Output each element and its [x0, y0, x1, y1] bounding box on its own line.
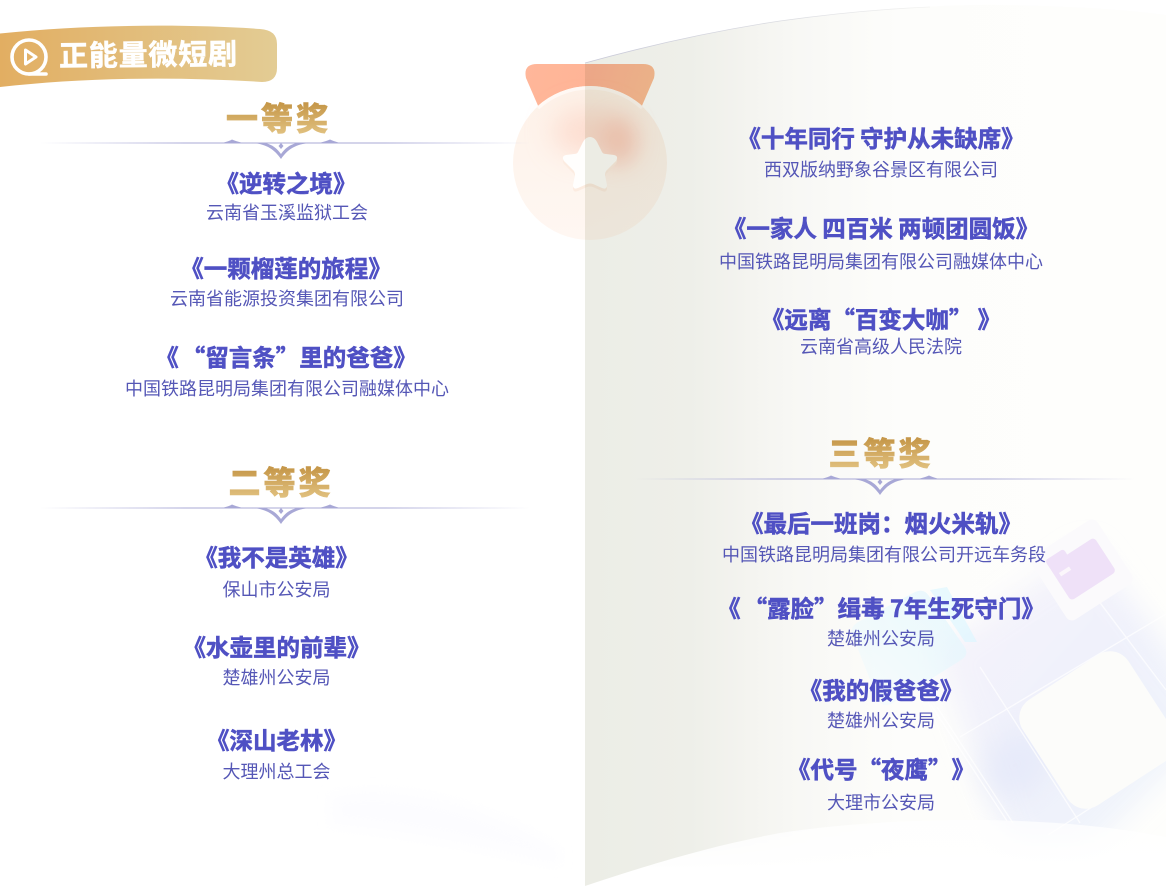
award entry: 《我的假爸爸》 — [799, 672, 963, 706]
award entry: 《十年同行 守护从未缺席》 — [737, 120, 1025, 154]
award entry: 中国铁路昆明局集团有限公司融媒体中心 — [125, 375, 449, 401]
award entry — [722, 504, 1046, 567]
award entry: 《逆转之境》 — [216, 164, 356, 198]
award entry: 楚雄州公安局 — [827, 707, 935, 733]
heading: first prize with ornament — [54, 94, 516, 159]
white rounded tile — [1011, 643, 1166, 817]
award entry — [717, 590, 1045, 651]
award entry: 《 留言条”里的爸爸》 — [155, 338, 417, 372]
award entry: 大理市公安局 — [827, 789, 935, 815]
award entry — [737, 120, 1025, 182]
banner — [0, 26, 277, 87]
award entry — [125, 338, 449, 401]
award entry: 保山市公安局 — [222, 576, 330, 602]
award entry: 《水壶里的前辈》 — [182, 628, 370, 662]
award entry: 楚雄州公安局 — [827, 625, 935, 651]
right page — [585, 5, 1166, 886]
award entry: 》 — [952, 750, 975, 784]
page bottom white curve — [585, 820, 1166, 886]
award entry: 云南省高级人民法院 — [800, 333, 962, 359]
award entry: 《最后一班岗：烟火米轨》 — [740, 504, 1022, 538]
award entry: 《远离“百变大咖” 》 — [761, 300, 1001, 334]
award entry: 云南省玉溪监狱工会 — [206, 199, 368, 225]
page top edge — [585, 7, 930, 63]
award entry — [787, 750, 975, 815]
award entry — [194, 538, 359, 602]
heading: second prize with ornament: 二等奖 — [228, 458, 334, 504]
award entry — [206, 722, 347, 784]
banner title: 正能量微短剧 — [59, 31, 238, 75]
award entry: “ — [182, 338, 205, 372]
award entry: 中国铁路昆明局集团有限公司融媒体中心 — [719, 248, 1043, 274]
award entry: 楚雄州公安局 — [222, 664, 330, 690]
panel: second prize continued — [719, 120, 1043, 359]
award entry — [182, 628, 370, 690]
award entry: 云南省能源投资集团有限公司 — [170, 285, 404, 311]
heading: third prize with ornament: 三等奖 — [828, 429, 934, 475]
award entry — [799, 672, 963, 733]
award entry — [170, 250, 404, 311]
award entry — [719, 210, 1043, 274]
award entry: 中国铁路昆明局集团有限公司开远车务段 — [722, 541, 1046, 567]
panel: third prize — [653, 429, 1120, 815]
heading: third prize with ornament — [653, 429, 1120, 495]
tech tiles decoration — [852, 517, 1166, 860]
banner shape and play icon — [0, 26, 277, 87]
lilac folder card — [1029, 517, 1135, 623]
award entry: 西双版纳野象谷景区有限公司 — [764, 156, 998, 182]
faint left bottom wash — [330, 791, 560, 866]
award entry — [761, 300, 1001, 359]
award entry: 《一颗榴莲的旅程》 — [180, 250, 392, 284]
medal — [513, 86, 667, 240]
panel: second prize — [54, 458, 516, 784]
award entry: “ — [744, 590, 767, 624]
award entry — [206, 164, 368, 225]
heading: second prize with ornament — [54, 458, 516, 524]
ribbon — [525, 64, 655, 108]
cyan folder — [852, 587, 977, 705]
award entry: 《我不是英雄》 — [194, 538, 359, 572]
award entry: 大理州总工会 — [222, 758, 330, 784]
panel: first prize — [54, 94, 516, 401]
heading: first prize with ornament: 一等奖 — [226, 94, 331, 140]
award entry: 《代号“夜鹰” — [787, 750, 952, 784]
award entry: 《深山老林》 — [206, 722, 347, 756]
award entry: 《 露脸”缉毒 7年生死守门》 — [717, 590, 1045, 624]
award entry: 《一家人 四百米 两顿团圆饭》 — [723, 210, 1039, 244]
